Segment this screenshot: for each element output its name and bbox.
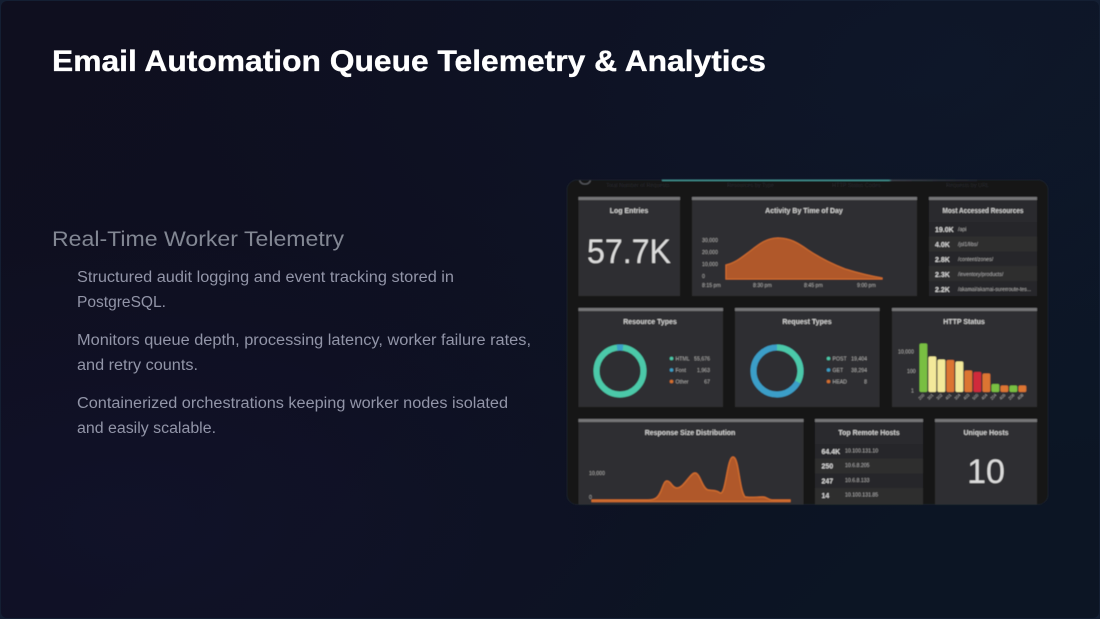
area chart: activity	[726, 238, 882, 279]
heading: real-time worker telemetry: Real-Time Worker Telemetry	[52, 228, 345, 251]
panel: response size distribution: 0	[589, 495, 592, 501]
text block: containerized orchestration	[77, 395, 508, 437]
panel: analytics dashboard screenshot: Resources by Type	[727, 183, 774, 189]
panel: analytics dashboard screenshot: HTTP Status Codes	[832, 183, 881, 189]
text block: queue monitoring: Monitors queue depth, processing latency, worker failure rates,	[77, 332, 531, 349]
text block: containerized orchestration: and easily scalable.	[77, 420, 216, 437]
panel: activity by time of day: 20,000	[702, 250, 718, 256]
panel: http status: 100	[907, 369, 916, 375]
panel: top remote hosts: 10.6.8.205	[845, 463, 870, 469]
panel: resource types	[578, 308, 723, 407]
panel: most accessed resources	[929, 197, 1037, 296]
legend: request types: HEAD	[832, 380, 847, 386]
panel: top remote hosts: 10.100.131.10	[845, 448, 878, 454]
donut chart: resource types	[596, 348, 644, 394]
panel: most accessed resources: 19.0K	[935, 227, 954, 234]
panel: http status: 200	[917, 392, 926, 401]
panel: activity by time of day: 8:15 pm	[702, 283, 721, 289]
panel: http status: 403	[962, 392, 971, 401]
panel: most accessed resources: Most Accessed Resources	[942, 208, 1024, 215]
legend: request types: POST	[832, 356, 847, 362]
stat: 10: 10	[967, 453, 1005, 491]
panel: worker telemetry text	[52, 228, 531, 437]
legend: resource types: 67	[704, 380, 710, 386]
panel: top remote hosts: 64.4K	[822, 449, 840, 456]
text block: audit logging: PostgreSQL.	[77, 294, 166, 311]
panel: activity by time of day: 10,000	[702, 262, 718, 268]
panel: most accessed resources: /akamai/akamai-surerroute-tes...	[958, 287, 1031, 293]
legend: resource types: 55,676	[694, 356, 710, 362]
panel: top remote hosts: 247	[822, 478, 833, 486]
legend: resource types: Other	[676, 380, 689, 386]
panel: log entries: Log Entries	[610, 208, 648, 215]
text block: audit logging: Structured audit logging and event tracking stored in	[77, 269, 454, 286]
panel: http status: 301	[926, 392, 935, 401]
legend: resource types: 1,963	[697, 368, 710, 374]
panel: http status: 302	[935, 392, 944, 401]
panel: activity by time of day: 9:00 pm	[857, 283, 876, 289]
area chart: response size	[592, 457, 790, 502]
legend: resource types: HTML	[676, 356, 690, 362]
panel: analytics dashboard screenshot: Requests by URL	[946, 183, 989, 189]
legend: request types: 19,404	[851, 356, 867, 362]
panel: http status: 405	[998, 392, 1007, 401]
panel: most accessed resources: 2.8K	[935, 257, 950, 264]
panel: unique hosts: Unique Hosts	[963, 430, 1009, 437]
panel: request types	[735, 308, 880, 407]
panel: http status	[892, 308, 1037, 407]
panel: top remote hosts: 250	[822, 464, 833, 470]
panel: top remote hosts: 10.6.8.133	[845, 478, 870, 484]
text block: containerized orchestration: Containerized orchestrations keeping worker nodes isolated	[77, 395, 508, 412]
legend: request types: 38,294	[851, 368, 867, 374]
legend: request types: GET	[832, 368, 844, 374]
panel: response size distribution: Response Size Distribution	[645, 430, 735, 437]
panel: unique hosts	[935, 419, 1037, 509]
panel: request types: Request Types	[782, 319, 832, 326]
panel: analytics dashboard screenshot: Total Number of Requests	[606, 183, 670, 189]
panel: top remote hosts: 10.100.131.85	[845, 492, 878, 498]
panel: http status: 304	[953, 392, 962, 401]
panel: activity by time of day: 8:30 pm	[753, 283, 772, 289]
legend: resource types: Font	[676, 368, 686, 374]
panel: http status: 404	[980, 392, 989, 401]
panel: http status: HTTP Status	[943, 319, 985, 326]
text block: queue monitoring	[77, 332, 531, 374]
panel: http status: 408	[1016, 392, 1025, 401]
stat: 57.7K: 57.7K	[587, 233, 671, 271]
legend: request types	[827, 356, 867, 386]
bar chart: http status	[920, 344, 1026, 392]
panel: activity by time of day: 30,000	[702, 238, 718, 244]
panel: http status: 401	[944, 392, 953, 401]
panel: top remote hosts	[815, 419, 923, 509]
panel: activity by time of day	[692, 197, 917, 296]
panel: activity by time of day: Activity By Time of Day	[765, 208, 843, 215]
panel: resource types: Resource Types	[623, 319, 677, 326]
panel: most accessed resources: /inventory/products/	[958, 272, 1004, 278]
panel: response size distribution	[578, 419, 804, 509]
panel: response size distribution: 10,000	[589, 471, 605, 477]
panel: most accessed resources: 2.3K	[935, 272, 950, 279]
panel: most accessed resources: 2.2K	[935, 287, 950, 294]
panel: top remote hosts: Top Remote Hosts	[838, 430, 900, 437]
panel: activity by time of day: 8:45 pm	[804, 283, 823, 289]
panel: http status: 204	[989, 392, 998, 401]
panel: http status: 10,000	[898, 350, 914, 356]
text block: audit logging	[77, 269, 454, 311]
panel: http status: 500	[971, 392, 980, 401]
panel: most accessed resources: /api	[958, 227, 966, 233]
panel: most accessed resources: /jsl1/libs/	[958, 242, 978, 248]
text block: queue monitoring: and retry counts.	[77, 357, 198, 374]
panel: http status: 206	[1007, 392, 1016, 401]
legend: resource types	[670, 356, 710, 386]
donut chart: request types	[754, 348, 800, 394]
panel: activity by time of day: 0	[702, 274, 705, 280]
panel: log entries	[578, 197, 680, 296]
legend: request types: 8	[864, 380, 867, 386]
panel: most accessed resources: /content/zones/	[958, 257, 994, 263]
title: Email Automation Queue Telemetry & Analytics	[52, 45, 766, 78]
panel: most accessed resources: 4.0K	[935, 242, 950, 249]
panel: analytics dashboard screenshot	[567, 180, 1048, 509]
panel: top remote hosts: 14	[822, 493, 829, 500]
panel: http status: 1	[911, 388, 914, 394]
